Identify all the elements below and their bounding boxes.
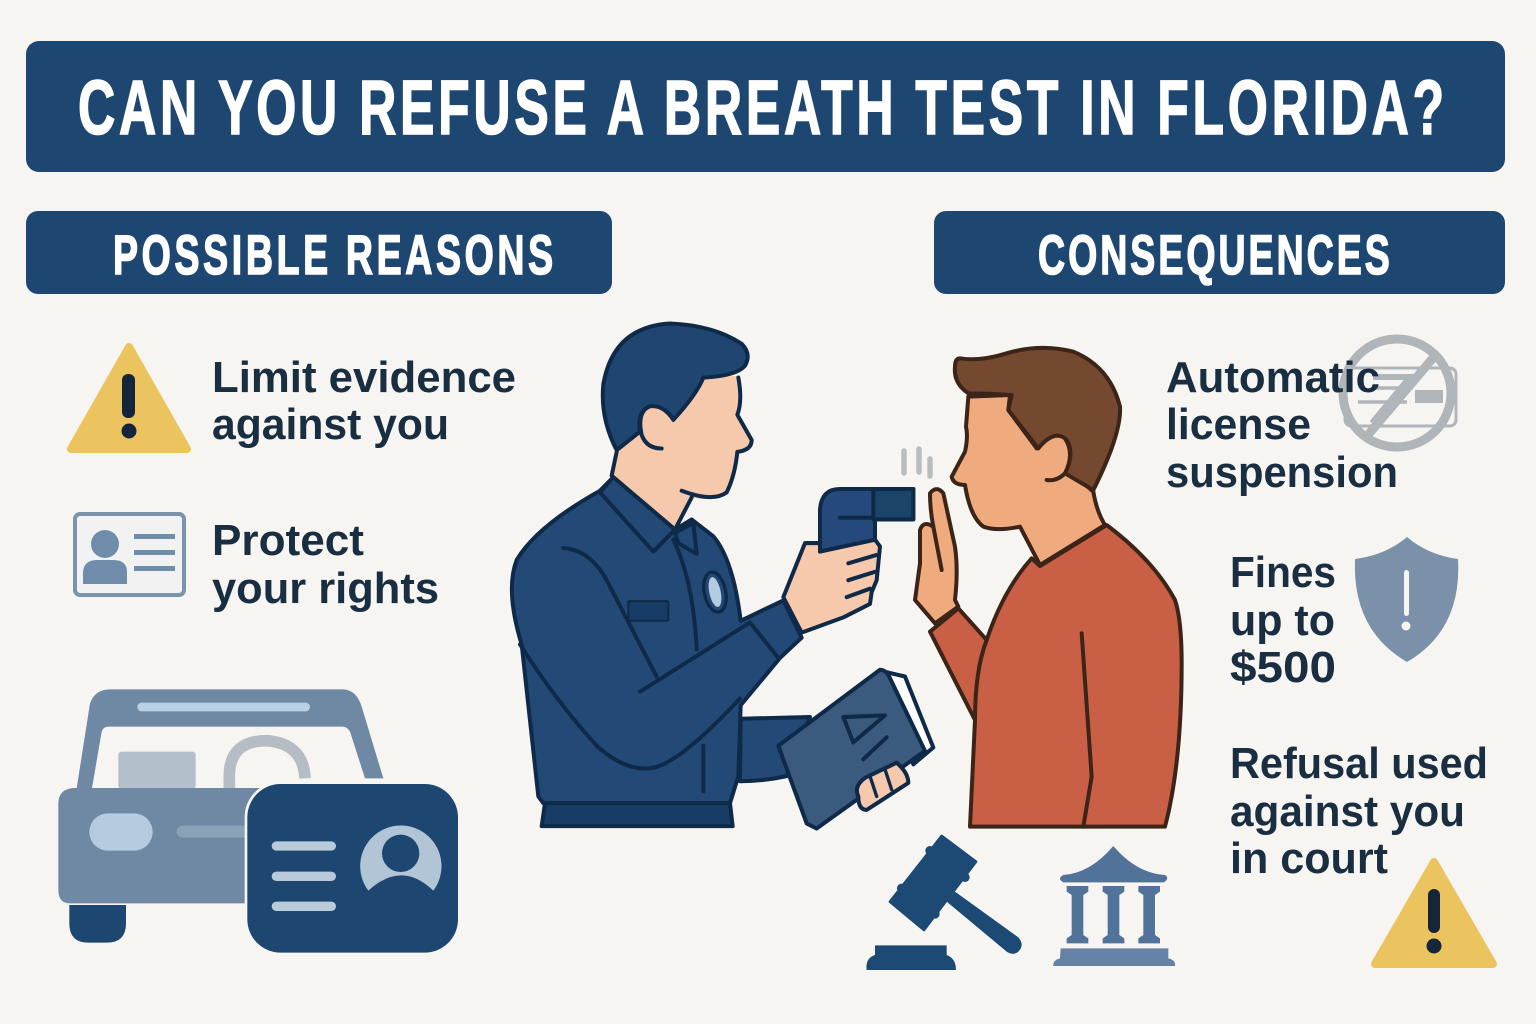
officer collar	[600, 477, 697, 554]
text: refusal used against you in court: Refusal used	[1230, 739, 1488, 788]
text: automatic license suspension: license	[1166, 400, 1311, 449]
text: fines up to $500	[1230, 548, 1336, 692]
text: protect your rights	[212, 516, 439, 613]
hand	[783, 540, 880, 633]
text: protect your rights: Protect	[212, 516, 364, 565]
text: limit evidence: against you	[212, 400, 449, 449]
text: refusal used against you in court	[1230, 739, 1488, 883]
icon: gavel	[866, 836, 1022, 970]
officer far arm	[740, 717, 810, 781]
title banner	[26, 41, 1505, 172]
officer torso	[512, 477, 802, 803]
driver ear	[1038, 436, 1070, 480]
text: limit evidence: Limit evidence	[212, 353, 516, 402]
icon: courthouse	[1053, 846, 1175, 966]
title banner: CAN YOU REFUSE A BREATH TEST IN FLORIDA?	[78, 65, 1444, 150]
officer arm lines	[520, 540, 778, 791]
illustration: book	[778, 670, 933, 829]
text: automatic license suspension: suspension	[1166, 448, 1398, 497]
heading: consequences: CONSEQUENCES	[1038, 225, 1390, 287]
text: refusal used against you in court: against you	[1230, 787, 1465, 836]
heading: possible reasons: POSSIBLE REASONS	[113, 225, 553, 287]
fingers	[847, 555, 877, 597]
officer pocket	[628, 601, 668, 621]
officer badge	[700, 570, 730, 614]
officer ear	[640, 406, 673, 448]
officer face outline	[612, 378, 752, 526]
text: refusal used against you in court: in court	[1230, 834, 1388, 883]
driver face and neck	[952, 395, 1105, 565]
driver shirt lines	[975, 633, 1092, 827]
icon: car	[58, 689, 383, 943]
heading: possible reasons	[26, 211, 612, 294]
gripping hand	[857, 763, 908, 810]
heading: consequences	[934, 211, 1505, 294]
icon: warning triangle right	[1375, 862, 1493, 964]
officer belt	[542, 803, 733, 826]
text: automatic license suspension	[1166, 353, 1398, 497]
device lines	[840, 512, 873, 524]
icon: id card	[75, 514, 184, 595]
illustration: officer	[512, 324, 810, 826]
driver hair	[955, 348, 1120, 490]
finger line	[933, 527, 942, 570]
breathalyzer	[820, 489, 913, 552]
icon: warning triangle left	[71, 347, 187, 449]
icon: license card	[247, 784, 458, 953]
grip fingers	[870, 769, 892, 796]
breathalyzer nozzle	[873, 489, 913, 519]
breath marks	[904, 449, 930, 476]
icon: no license	[1343, 339, 1456, 447]
letter	[843, 715, 887, 759]
cover	[778, 670, 925, 829]
illustration: breathalyzer and hand	[783, 489, 913, 633]
text: fines up to $500: $500	[1230, 643, 1336, 692]
officer hair	[603, 324, 748, 450]
text: protect your rights: your rights	[212, 564, 439, 613]
icon: shield	[1355, 537, 1458, 662]
driver shirt	[930, 525, 1182, 827]
illustration: driver	[915, 348, 1182, 827]
text: limit evidence	[212, 353, 516, 449]
pages	[883, 671, 933, 764]
driver hand	[915, 489, 958, 623]
text: fines up to $500: up to	[1230, 596, 1335, 645]
officer face and neck	[612, 376, 752, 530]
text: automatic license suspension: Automatic	[1166, 353, 1380, 402]
text: fines up to $500: Fines	[1230, 548, 1336, 597]
